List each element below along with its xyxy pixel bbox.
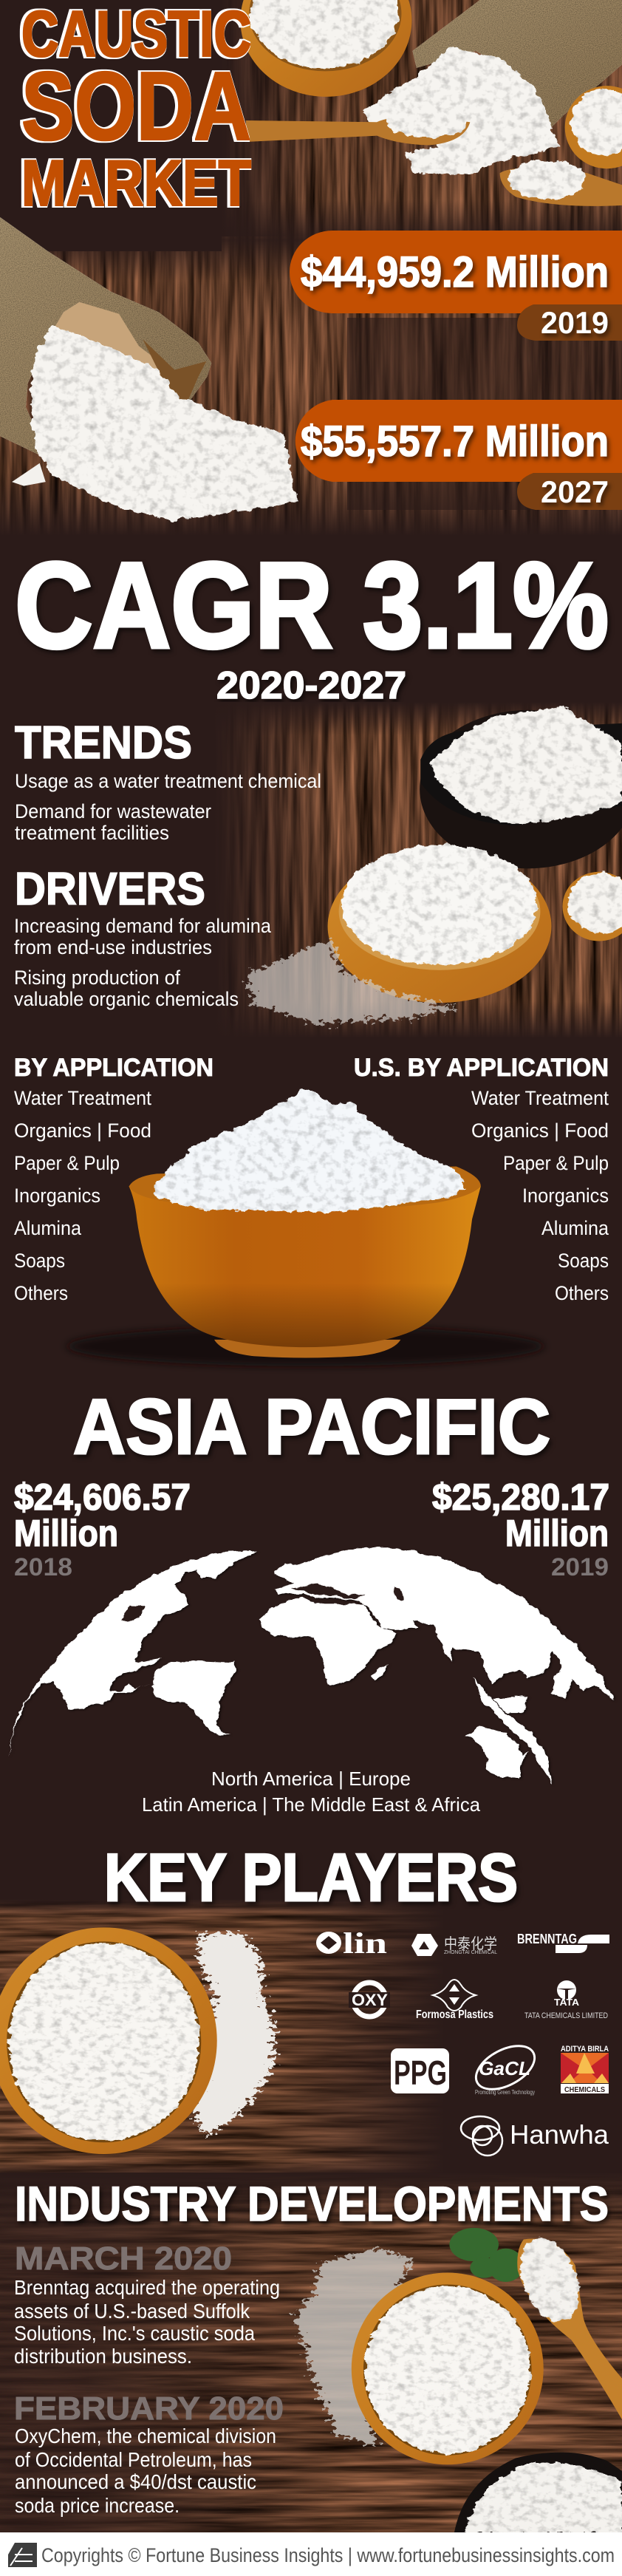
U.S. by application list: Soaps [558, 1250, 609, 1272]
title: Caustic Soda Market: SODA [21, 52, 250, 160]
logo: PPG [391, 2048, 449, 2093]
spoon with salt [246, 103, 470, 146]
February 2020 item: announced a $40/dst caustic [15, 2470, 256, 2493]
CAGR headline: 2020-2027 [216, 664, 406, 707]
photo: bowl, spoon and leaves [293, 2228, 622, 2532]
trends list: Usage as a water treatment chemical [15, 770, 321, 792]
U.S. by application list [354, 1054, 609, 1304]
drivers list: valuable organic chemicals [14, 988, 239, 1010]
February 2020 item: soda price increase. [15, 2494, 180, 2517]
by application list: Organics | Food [14, 1120, 151, 1142]
lower spilled salt [30, 326, 298, 521]
lower burlap sack [0, 217, 211, 460]
Asia Pacific heading: ASIA PACIFIC [73, 1383, 550, 1471]
hero wood background [0, 0, 622, 536]
spoon salt [511, 2235, 587, 2324]
scattered salt [194, 1934, 274, 2136]
U.S. by application list: Inorganics [522, 1185, 609, 1207]
black bowl [420, 707, 622, 868]
Asia Pacific 2019 value: Million [505, 1513, 609, 1554]
trends list: treatment facilities [15, 822, 169, 844]
logo: Hanwha [461, 2116, 609, 2156]
by application list: Water Treatment [14, 1087, 151, 1109]
March 2020 item: distribution business. [14, 2345, 192, 2368]
Australia [466, 1725, 530, 1778]
Asia Pacific 2019 value: 2019 [551, 1553, 609, 1581]
logo: GACL: Promoting Green Technology [475, 2089, 535, 2096]
by application list: Alumina [14, 1217, 82, 1239]
February 2020 item [14, 2391, 284, 2517]
drivers list [14, 915, 272, 1010]
Hudson Bay [121, 1606, 145, 1621]
logo: Aditya Birla Chemicals: CHEMICALS [564, 2086, 605, 2094]
world map [8, 1547, 615, 1784]
value pill 2019: 2019 [541, 305, 609, 340]
inland seas [293, 1583, 405, 1600]
Madagascar [371, 1665, 387, 1680]
salt mound [153, 1089, 466, 1212]
Asia Pacific 2018 value [14, 1476, 191, 1581]
Southeast Asia islands [474, 1677, 551, 1784]
salt chunk [12, 463, 46, 486]
logo: GACL [469, 2037, 541, 2098]
logo: PPG: PPG [394, 2054, 447, 2092]
February 2020 item: FEBRUARY 2020 [14, 2391, 284, 2427]
trends and drivers panel [0, 702, 622, 1038]
salt pile [246, 943, 457, 1023]
U.S. by application list: Paper & Pulp [503, 1152, 609, 1174]
drivers list: from end-use industries [14, 936, 212, 958]
right bowl [565, 86, 622, 168]
by application list: BY APPLICATION [14, 1054, 213, 1082]
spilled salt [363, 47, 559, 174]
other regions: North America | Europe [211, 1768, 411, 1790]
title: Caustic Soda Market: MARKET [21, 146, 250, 219]
key players panel [0, 1841, 622, 2180]
by application list: Paper & Pulp [14, 1152, 120, 1174]
drivers heading: DRIVERS [15, 864, 205, 915]
Eurasia [274, 1547, 615, 1700]
wooden spoon [517, 2239, 622, 2419]
U.S. by application list: Organics | Food [471, 1120, 609, 1142]
value pill 2027 [295, 400, 622, 510]
logo: GACL: GaCL [479, 2057, 530, 2079]
other regions [142, 1768, 481, 1816]
title: Caustic Soda Market [21, 0, 250, 219]
footer [0, 2532, 622, 2576]
lower right spoon [500, 160, 622, 206]
March 2020 item: MARCH 2020 [15, 2241, 232, 2277]
hero photo: bowls, sacks and spoons of salt [0, 0, 622, 521]
logo: Tata Chemicals [524, 1980, 608, 2020]
logo: Oxy: OXY [352, 1991, 388, 2009]
top wooden bowl [240, 0, 411, 97]
top burlap sack [412, 0, 622, 127]
Asia Pacific 2018 value: $24,606.57 [14, 1476, 191, 1518]
by application list: Inorganics [14, 1185, 100, 1207]
trends list [15, 770, 321, 844]
photo: wooden bowl of salt [0, 1927, 274, 2154]
bowl foot [214, 1340, 400, 1357]
icon: Fortune Business Insights mark [8, 2543, 37, 2567]
South America [153, 1660, 234, 1737]
by application list: Soaps [14, 1250, 65, 1272]
by application list [14, 1054, 213, 1304]
logo: Tata Chemicals: TATA [554, 1997, 580, 2008]
hero panel [0, 0, 622, 536]
key players wood background [0, 1899, 622, 2180]
black bowl salt [464, 2462, 622, 2532]
Africa [260, 1597, 397, 1687]
value pill 2019 [290, 231, 622, 341]
other regions: Latin America | The Middle East & Africa [142, 1793, 481, 1816]
logo: Hanwha: Hanwha [510, 2119, 609, 2150]
wooden bowl [352, 2272, 544, 2464]
logo: Olin: lin [343, 1926, 387, 1960]
bowl salt [365, 2286, 530, 2454]
March 2020 item [14, 2241, 280, 2368]
trends wood background [0, 702, 622, 1038]
application panel [14, 1054, 609, 1366]
March 2020 item: Solutions, Inc.'s caustic soda [14, 2322, 255, 2345]
developments wood background [0, 2173, 622, 2533]
February 2020 item: of Occidental Petroleum, has [15, 2448, 252, 2471]
photo: salt bowls [246, 707, 622, 1023]
bowl [0, 1927, 217, 2154]
logo: Zhongtai Chemical: ZHONGTAI CHEMICAL [444, 1950, 497, 1955]
bowl body [129, 1186, 481, 1347]
Asia Pacific 2018 value: 2018 [14, 1553, 72, 1581]
U.S. by application list: Alumina [541, 1217, 609, 1239]
bowl rim [129, 1167, 481, 1211]
logo: Aditya Birla Chemicals [561, 2045, 609, 2094]
small spoon [562, 872, 622, 941]
trends list: Demand for wastewater [15, 800, 211, 822]
drivers list: Increasing demand for alumina [14, 915, 272, 937]
U.S. by application list: Others [555, 1282, 609, 1304]
North America [8, 1550, 258, 1756]
logo: Zhongtai Chemical: 中泰化学 [444, 1935, 497, 1952]
drivers list: Rising production of [14, 967, 180, 989]
trends heading: TRENDS [15, 718, 192, 769]
Asia Pacific 2019 value: $25,280.17 [432, 1476, 609, 1518]
wooden bowl [328, 845, 551, 1003]
scattered salt [293, 2249, 412, 2445]
black bowl [454, 2453, 622, 2532]
Asia Pacific 2018 value: Million [14, 1513, 118, 1554]
logo: Oxy [349, 1983, 390, 2017]
logo: Brenntag [517, 1932, 609, 1953]
logo: Aditya Birla Chemicals: ADITYA BIRLA [561, 2045, 609, 2054]
key players heading: KEY PLAYERS [104, 1841, 518, 1915]
logo: Olin [316, 1926, 387, 1960]
logo: Zhongtai Chemical [411, 1934, 497, 1956]
bowl shadow [67, 1326, 544, 1366]
value pill 2027: 2027 [541, 474, 609, 509]
U.S. by application list: U.S. BY APPLICATION [354, 1054, 609, 1082]
Asia Pacific 2019 value [432, 1476, 609, 1581]
by application list: Others [14, 1282, 68, 1304]
logo: Formosa Plastics: Formosa Plastics [416, 2008, 493, 2021]
industry developments panel [0, 2173, 622, 2533]
mint leaves [449, 2228, 524, 2282]
logo: Brenntag: BRENNTAG [517, 1932, 577, 1946]
logo: Formosa Plastics [416, 1980, 493, 2021]
orange bowl of caustic soda flakes [67, 1089, 544, 1366]
U.S. by application list: Water Treatment [471, 1087, 609, 1109]
February 2020 item: OxyChem, the chemical division [15, 2425, 276, 2447]
March 2020 item: Brenntag acquired the operating [14, 2276, 280, 2299]
March 2020 item: assets of U.S.-based Suffolk [14, 2300, 250, 2323]
